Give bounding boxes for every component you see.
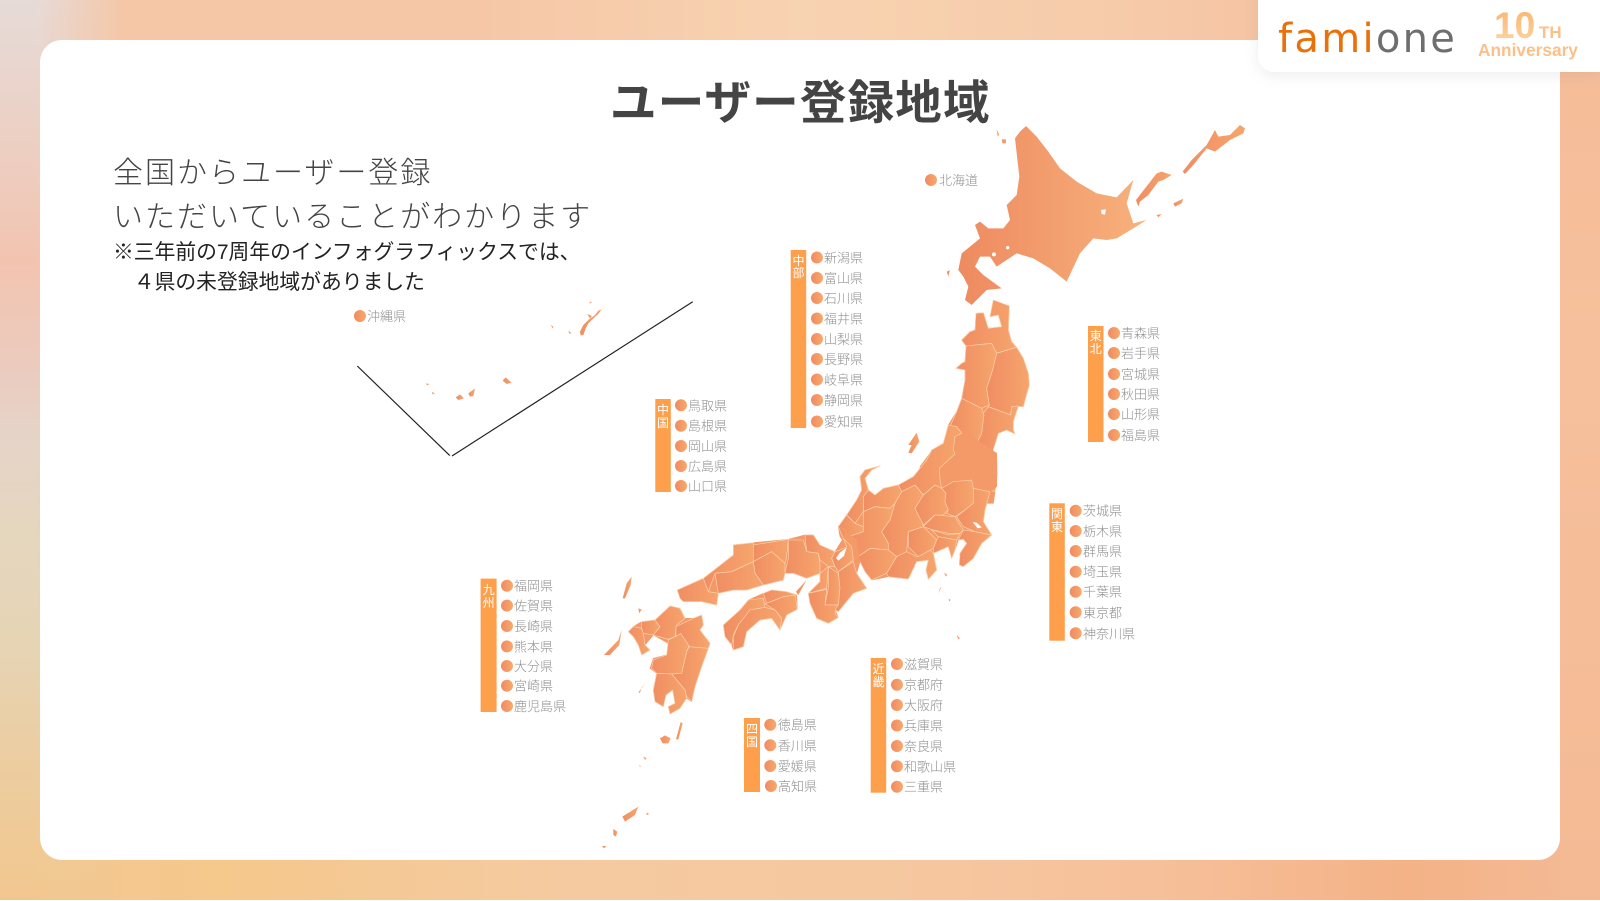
footnote: ４県の未登録地域がありました xyxy=(134,271,425,294)
label group: Kyushu: 州 xyxy=(483,596,495,610)
logo: famione 10th anniversary: TH xyxy=(1539,23,1562,42)
label group: Chugoku: 広島県 xyxy=(688,459,727,474)
label group: Shikoku: 高知県 xyxy=(778,779,817,794)
label group: Chubu: 石川県 xyxy=(824,291,863,306)
label group: Chugoku: 鳥取県 xyxy=(688,398,727,413)
label group: Shikoku: 四 xyxy=(746,722,758,736)
label group: Kyushu: 長崎県 xyxy=(514,619,553,634)
logo: famione 10th anniversary: famione xyxy=(1278,16,1457,62)
footnote: ※三年前の7周年のインフォグラフィックスでは、 xyxy=(113,241,580,264)
label group: Kinki: 京都府 xyxy=(904,678,943,693)
footnote xyxy=(113,241,580,294)
label group: Kanto: 東 xyxy=(1051,520,1063,534)
label group: Kanto: 東京都 xyxy=(1083,605,1122,620)
label group: Kinki: 大阪府 xyxy=(904,698,943,713)
label group: Tohoku: 山形県 xyxy=(1121,407,1160,422)
lead text: 全国からユーザー登録 xyxy=(113,157,432,190)
label group: Shikoku: 国 xyxy=(746,735,758,749)
label group: Tohoku: 東 xyxy=(1090,329,1102,343)
label group: Kyushu: 宮崎県 xyxy=(514,679,553,694)
label group: Kyushu: 大分県 xyxy=(514,659,553,674)
lead text: いただいていることがわかります xyxy=(113,201,592,234)
label group: Tohoku: 福島県 xyxy=(1121,428,1160,443)
label group: Tohoku: 北 xyxy=(1090,342,1102,356)
label group: Chubu: 山梨県 xyxy=(824,332,863,347)
lead text xyxy=(113,157,592,234)
label group: Kinki: 畿 xyxy=(872,675,885,689)
logo: famione 10th anniversary xyxy=(1278,5,1578,62)
logo card xyxy=(1258,0,1600,72)
label group: Kyushu: 佐賀県 xyxy=(514,599,553,614)
label group: Chubu: 部 xyxy=(792,266,805,280)
label: Okinawa: 沖縄県 xyxy=(367,309,406,324)
label group: Kanto: 関 xyxy=(1051,507,1063,521)
label group: Kanto: 千葉県 xyxy=(1083,585,1122,600)
label group: Kinki: 奈良県 xyxy=(904,739,943,754)
label group: Kanto xyxy=(1049,503,1135,641)
label group: Kanto: 茨城県 xyxy=(1083,504,1122,519)
label group: Kyushu xyxy=(481,579,566,714)
label group: Chugoku xyxy=(655,398,727,494)
Hokkaido and northern islands xyxy=(947,125,1245,305)
label group: Kyushu: 九 xyxy=(483,583,495,597)
label group: Kinki: 兵庫県 xyxy=(904,718,943,734)
label group: Chugoku: 島根県 xyxy=(688,419,727,434)
label group: Shikoku: 愛媛県 xyxy=(778,759,817,774)
label group: Chubu: 福井県 xyxy=(824,312,863,326)
label group: Chubu: 富山県 xyxy=(824,271,863,286)
Okinawa inset frame lines xyxy=(357,302,693,456)
label group: Shikoku: 徳島県 xyxy=(778,718,817,733)
label group: Kyushu: 鹿児島県 xyxy=(514,699,566,714)
label group: Chugoku: 中 xyxy=(657,402,669,417)
label group: Chubu: 愛知県 xyxy=(824,414,863,430)
label group: Chubu: 岐阜県 xyxy=(824,372,863,388)
label group: Chugoku: 山口県 xyxy=(688,479,727,494)
map of Japan xyxy=(426,125,1245,848)
label group: Kinki: 三重県 xyxy=(904,780,943,795)
label group: Kyushu: 熊本県 xyxy=(514,639,553,654)
Chubu and Kanto prefectures xyxy=(838,425,997,639)
label group: Chubu: 中 xyxy=(792,253,805,268)
label group: Kyushu: 福岡県 xyxy=(514,579,553,594)
label group: Chugoku: 国 xyxy=(657,416,669,430)
label group: Kanto: 埼玉県 xyxy=(1083,565,1122,580)
label group: Tohoku: 秋田県 xyxy=(1121,387,1160,402)
Kinki, Chugoku, Shikoku and Kyushu prefectures xyxy=(602,527,867,848)
logo: famione 10th anniversary: 10 xyxy=(1494,5,1535,46)
title: ユーザー登録地域 xyxy=(610,77,991,129)
label group: Kinki: 滋賀県 xyxy=(904,657,943,672)
label group: Kanto: 神奈川県 xyxy=(1083,626,1135,641)
label: Hokkaido: 北海道 xyxy=(939,173,978,188)
label group: Tohoku xyxy=(1088,326,1160,443)
Okinawa islands xyxy=(426,302,602,400)
label group: Chubu: 新潟県 xyxy=(824,250,863,266)
label group: Kinki xyxy=(871,657,956,795)
label group: Chubu xyxy=(791,250,863,430)
label group: Shikoku xyxy=(744,718,817,794)
label group: Chubu: 長野県 xyxy=(824,352,863,367)
label group: Chubu: 静岡県 xyxy=(824,393,863,408)
label group: Kanto: 栃木県 xyxy=(1083,524,1122,539)
label group: Tohoku: 宮城県 xyxy=(1121,367,1160,382)
label group: Kinki: 和歌山県 xyxy=(904,759,956,774)
label group: Tohoku: 青森県 xyxy=(1121,326,1160,341)
Tohoku prefectures xyxy=(920,300,1029,503)
label group: Tohoku: 岩手県 xyxy=(1121,346,1160,361)
label group: Kanto: 群馬県 xyxy=(1083,544,1122,559)
label group: Kinki: 近 xyxy=(872,662,885,676)
logo: famione 10th anniversary: Anniversary xyxy=(1478,40,1578,60)
label group: Shikoku: 香川県 xyxy=(778,738,817,753)
label group: Chugoku: 岡山県 xyxy=(688,439,727,454)
